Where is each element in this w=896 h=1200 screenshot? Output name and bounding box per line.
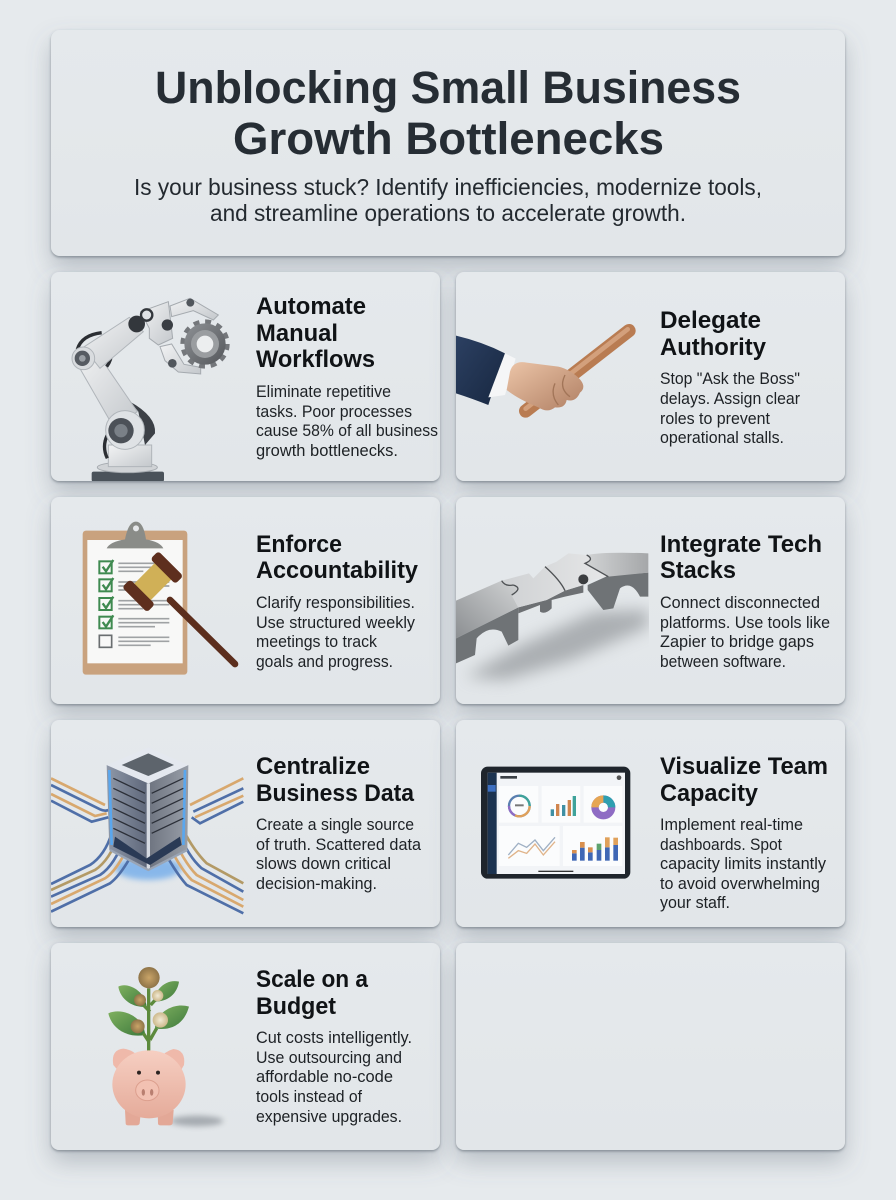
heading: Capacity <box>660 780 759 807</box>
body text: affordable no-code <box>256 1068 393 1086</box>
body text: Eliminate repetitive <box>256 383 391 401</box>
heading: Manual <box>256 320 338 347</box>
icon: server tower with cables <box>51 747 243 913</box>
body text: cause 58% of all business <box>256 422 438 440</box>
panel: enforce accountability <box>51 497 440 704</box>
body text <box>660 370 801 447</box>
heading <box>256 966 369 1020</box>
body text: Create a single source <box>256 816 414 834</box>
panel: integrate tech stacks <box>456 497 845 704</box>
body text: meetings to track <box>256 633 378 651</box>
body text: slows down critical <box>256 855 391 873</box>
icon: robot arm with gear <box>72 298 226 482</box>
heading <box>660 307 767 361</box>
heading: Accountability <box>256 557 419 584</box>
panel: scale on a budget <box>51 943 440 1150</box>
body text: roles to prevent <box>660 410 770 428</box>
header card background <box>51 30 845 256</box>
heading <box>256 753 415 807</box>
card background <box>456 497 845 704</box>
heading <box>256 531 419 584</box>
body text: decision-making. <box>256 875 377 893</box>
panel: centralize business data <box>51 720 440 927</box>
card background <box>456 720 845 927</box>
heading: Integrate Tech <box>660 531 822 558</box>
icon: piggy bank with coin plant <box>108 967 223 1126</box>
body text: capacity limits instantly <box>660 855 827 873</box>
heading: Budget <box>256 993 336 1020</box>
body text: Use outsourcing and <box>256 1049 402 1067</box>
heading: Visualize Team <box>660 753 828 780</box>
body text: platforms. Use tools like <box>660 614 830 632</box>
heading: Business Data <box>256 780 415 807</box>
body text: Cut costs intelligently. <box>256 1029 412 1047</box>
panel: visualize team capacity <box>456 720 845 927</box>
subtitle: and streamline operations to accelerate growth. <box>210 200 686 226</box>
heading: Automate <box>256 293 366 320</box>
heading: Scale on a <box>256 966 369 993</box>
body text: Stop "Ask the Boss" <box>660 370 800 388</box>
body text: Clarify responsibilities. <box>256 594 415 612</box>
heading: Workflows <box>256 346 375 373</box>
panel: empty card <box>456 943 845 1150</box>
heading: Delegate <box>660 307 761 334</box>
body text: goals and progress. <box>256 653 393 671</box>
body text <box>660 594 830 671</box>
card background <box>51 943 440 1150</box>
body text: Use structured weekly <box>256 614 416 632</box>
title <box>155 62 741 164</box>
title: Unblocking Small Business <box>155 62 741 113</box>
body text: expensive upgrades. <box>256 1108 402 1126</box>
icon: hand passing baton <box>456 329 629 411</box>
body text: operational stalls. <box>660 429 784 447</box>
subtitle <box>134 174 762 226</box>
card background <box>51 720 440 927</box>
body text: to avoid overwhelming <box>660 875 820 893</box>
panel: header <box>51 30 845 256</box>
body text: delays. Assign clear <box>660 390 801 408</box>
heading <box>660 753 828 807</box>
body text <box>660 816 827 912</box>
body text: tasks. Poor processes <box>256 403 412 421</box>
icon: tablet dashboard <box>481 767 630 879</box>
heading: Enforce <box>256 531 342 558</box>
subtitle: Is your business stuck? Identify inefficiencies, modernize tools, <box>134 174 762 200</box>
card background <box>51 497 440 704</box>
body text <box>256 816 422 893</box>
body text: Zapier to bridge gaps <box>660 633 814 651</box>
body text: your staff. <box>660 894 730 912</box>
body text: Connect disconnected <box>660 594 820 612</box>
card background <box>51 272 440 481</box>
card background <box>456 272 845 481</box>
body text <box>256 383 438 460</box>
heading: Stacks <box>660 557 736 584</box>
icon: puzzle bridge <box>456 553 648 680</box>
panel: automate manual workflows <box>51 272 440 482</box>
heading: Centralize <box>256 753 370 780</box>
heading <box>256 293 375 373</box>
body text: tools instead of <box>256 1088 362 1106</box>
body text <box>256 594 416 671</box>
body text: between software. <box>660 653 786 671</box>
body text <box>256 1029 412 1126</box>
heading: Authority <box>660 334 767 361</box>
title: Growth Bottlenecks <box>233 113 664 164</box>
body text: dashboards. Spot <box>660 836 782 854</box>
body text: Implement real-time <box>660 816 803 834</box>
body text: of truth. Scattered data <box>256 836 422 854</box>
panel: delegate authority <box>456 272 845 481</box>
heading <box>660 531 822 584</box>
icon: clipboard with gavel <box>83 522 235 675</box>
body text: growth bottlenecks. <box>256 442 398 460</box>
